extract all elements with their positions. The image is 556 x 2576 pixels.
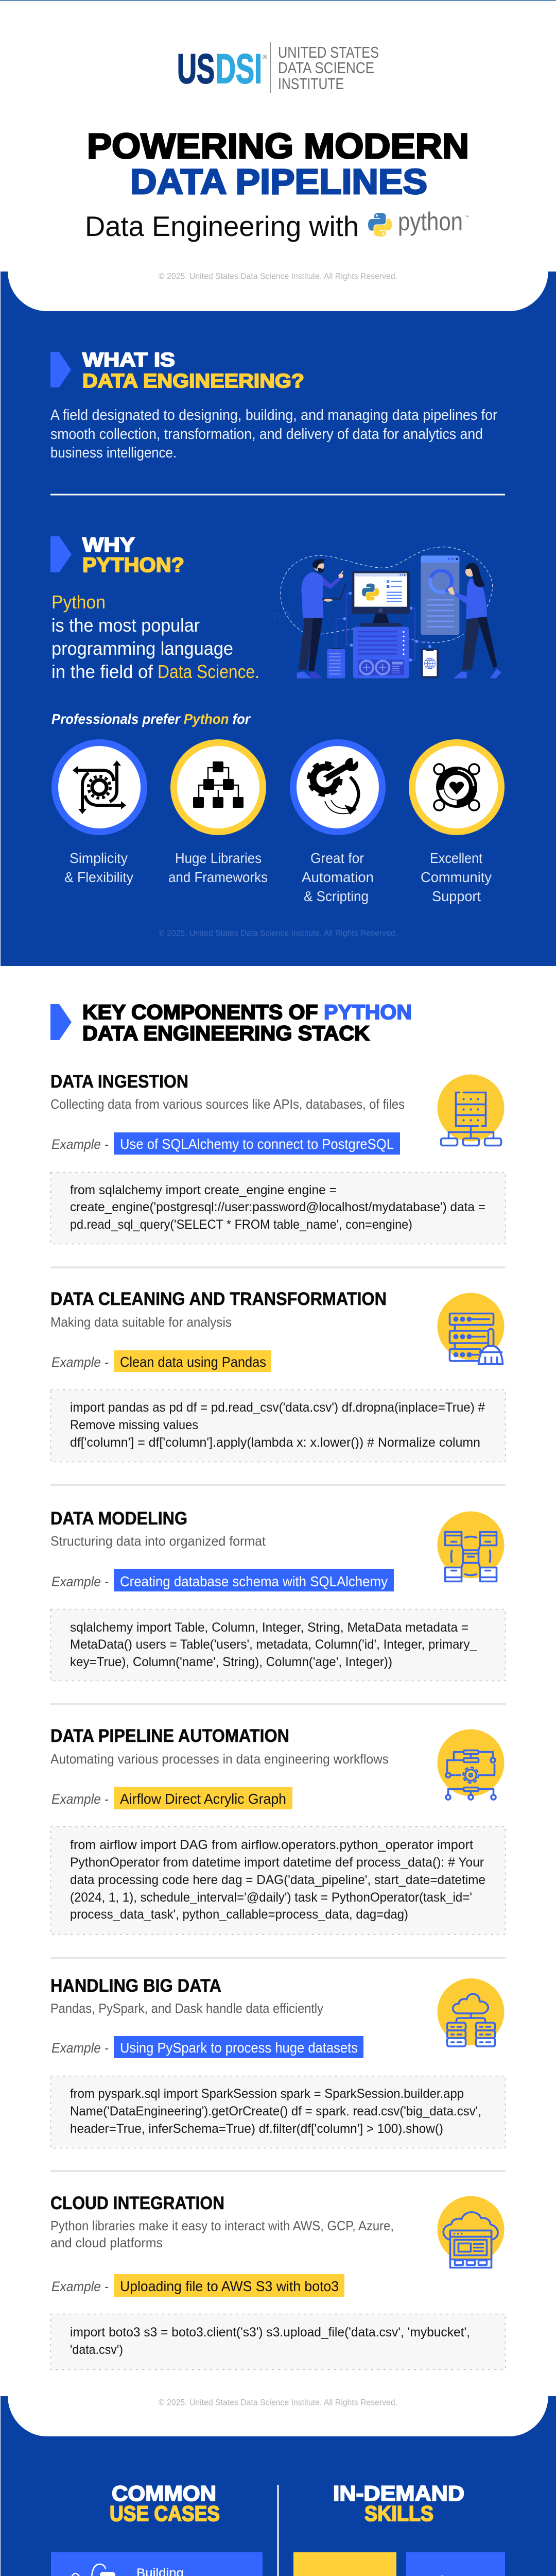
- text: python popularity: is the most popular: [51, 615, 200, 636]
- section: data modeling: sqlalchemy import Table, Column, Integer, String, MetaData metadata =: [70, 1620, 468, 1635]
- section: data cleaning: [50, 1289, 506, 1462]
- copyright: © 2025. United States Data Science Institute. All Rights Reserved.: [159, 2398, 397, 2407]
- section: data ingestion: Use of SQLAlchemy to connect to PostgreSQL: [120, 1136, 394, 1152]
- section: data pipeline automation: Example -: [51, 1791, 109, 1807]
- section: handling big data: HANDLING BIG DATA: [50, 1976, 221, 1996]
- labels: reasons to prefer python: & Flexibility: [64, 869, 133, 885]
- section: handling big data: Name('DataEngineering').getOrCreate() df = spark. read.csv('big_data.csv',: [70, 2104, 481, 2119]
- icon: community support: [409, 739, 505, 835]
- section: data cleaning: Example -: [51, 1354, 109, 1370]
- section: data pipeline automation: DATA PIPELINE AUTOMATION: [50, 1726, 289, 1746]
- icon: simplicity and flexibility: [51, 739, 147, 835]
- heading: why python: WHY: [82, 534, 135, 556]
- title: POWERING MODERN: [87, 126, 469, 166]
- panel: blue lower background: [1, 2396, 556, 2576]
- heading: common use cases: USE CASES: [110, 2501, 220, 2526]
- icon: pipeline automation: [438, 1729, 505, 1800]
- subtitle with python logo: python: [398, 207, 463, 236]
- text: python popularity: in the field of: [51, 661, 153, 682]
- heading: what is data engineering: DATA ENGINEERING?: [82, 370, 304, 392]
- title: DATA PIPELINES: [130, 162, 427, 201]
- subtitle with python logo: Data Engineering with: [85, 210, 359, 242]
- section: data cleaning: df['column'] = df['column'].apply(lambda x: x.lower()) # Normalize column: [70, 1435, 480, 1450]
- section: data modeling: DATA MODELING: [50, 1509, 187, 1529]
- section: data cleaning: Clean data using Pandas: [120, 1354, 266, 1370]
- panel: blue intro background: [1, 271, 556, 966]
- icon: data modeling: [438, 1512, 505, 1582]
- text: data engineering definition: A field designated to designing, building, and managing data pipelines for: [50, 407, 497, 423]
- labels: reasons to prefer python: Huge Libraries: [175, 850, 262, 866]
- section: handling big data: [50, 1976, 506, 2148]
- section: handling big data: header=True, inferSchema=True) df.filter(df['column'] > 100).show(): [70, 2122, 443, 2136]
- section: cloud integration: Example -: [51, 2279, 109, 2294]
- use case: etl/elt pipelines: [51, 2552, 263, 2576]
- heading: key components: [50, 1001, 412, 1045]
- section: data modeling: [50, 1509, 506, 1681]
- section: handling big data: Pandas, PySpark, and Dask handle data efficiently: [50, 2001, 323, 2016]
- labels: reasons to prefer python: Excellent: [430, 850, 482, 866]
- labels: reasons to prefer python: Community: [421, 869, 492, 885]
- logo: USDSI: DSI: [216, 46, 262, 92]
- section: data pipeline automation: [50, 1726, 506, 1934]
- labels: reasons to prefer python: [64, 850, 492, 904]
- section: data pipeline automation: (2024, 1, 1), schedule_interval='@daily') task = PythonOperator(task_id=': [70, 1890, 472, 1905]
- icon: data cleaning: [438, 1293, 505, 1364]
- heading: in-demand skills: IN-DEMAND: [333, 2481, 464, 2505]
- labels: reasons to prefer python: Great for: [310, 850, 364, 866]
- heading: why python: PYTHON?: [82, 554, 184, 577]
- section: data modeling: Creating database schema with SQLAlchemy: [120, 1573, 388, 1589]
- heading: what is data engineering: WHAT IS: [82, 349, 175, 371]
- text: data engineering definition: smooth collection, transformation, and delivery of data for analytics and: [50, 426, 483, 443]
- section: cloud integration: 'data.csv'): [70, 2343, 123, 2357]
- section: data cleaning: Making data suitable for analysis: [50, 1314, 232, 1330]
- logo: USDSI: [177, 42, 379, 93]
- labels: reasons to prefer python: and Frameworks: [168, 869, 268, 885]
- section: data cleaning: import pandas as pd df = pd.read_csv('data.csv') df.dropna(inplace=True) #: [70, 1400, 485, 1415]
- title: [87, 126, 469, 201]
- heading: common use cases: COMMON: [112, 2481, 216, 2505]
- section: data pipeline automation: from airflow import DAG from airflow.operators.python_operator import: [70, 1838, 473, 1852]
- heading: key components: DATA ENGINEERING STACK: [82, 1022, 370, 1045]
- heading: what is data engineering: [50, 349, 304, 392]
- section: data cleaning: Remove missing values: [70, 1418, 198, 1432]
- labels: reasons to prefer python: Support: [432, 888, 481, 904]
- section: handling big data: Example -: [51, 2040, 109, 2056]
- section: cloud integration: [50, 2193, 506, 2370]
- text: data engineering definition: business intelligence.: [50, 445, 177, 461]
- section: cloud integration: Uploading file to AWS S3 with boto3: [120, 2278, 339, 2294]
- section: data ingestion: pd.read_sql_query('SELECT * FROM table_name', con=engine): [70, 1217, 412, 1232]
- copyright: © 2025. United States Data Science Institute. All Rights Reserved.: [159, 928, 397, 938]
- section: data modeling: MetaData() users = Table('users', metadata, Column('id', Integer, primary_: [70, 1637, 477, 1652]
- logo: USDSI: DATA SCIENCE: [278, 59, 374, 77]
- section: data ingestion: Example -: [51, 1137, 109, 1152]
- heading: in-demand skills: SKILLS: [364, 2501, 433, 2526]
- section: data modeling: Structuring data into organized format: [50, 1533, 266, 1549]
- section: data modeling: key=True), Column('name', String), Column('age', Integer)): [70, 1655, 392, 1669]
- text: professionals prefer python: Professionals prefer Python for: [51, 711, 251, 727]
- section: data ingestion: DATA INGESTION: [50, 1072, 188, 1092]
- section: cloud integration: and cloud platforms: [50, 2235, 163, 2250]
- skill: sql and python: [293, 2552, 396, 2576]
- labels: reasons to prefer python: Simplicity: [70, 850, 128, 866]
- text: python popularity: programming language: [51, 638, 233, 659]
- section: data cleaning: DATA CLEANING AND TRANSFORMATION: [50, 1289, 387, 1309]
- section: data ingestion: Collecting data from various sources like APIs, databases, of files: [50, 1096, 405, 1112]
- section: data pipeline automation: PythonOperator from datetime import datetime def process_data(): # Your: [70, 1855, 484, 1870]
- heading: in-demand skills: [333, 2481, 464, 2526]
- logo: USDSI: US: [177, 46, 215, 92]
- text: data engineering definition: [50, 407, 497, 461]
- icon: automation and scripting: [290, 739, 386, 835]
- heading: key components: KEY COMPONENTS OF PYTHON: [82, 1001, 412, 1024]
- heading: why python: [50, 534, 184, 577]
- copyright: © 2025. United States Data Science Institute. All Rights Reserved.: [159, 272, 397, 281]
- heading: common use cases: [110, 2481, 220, 2526]
- text: python popularity: [51, 591, 259, 682]
- subtitle with python logo: ™: [465, 215, 469, 219]
- logo: USDSI: INSTITUTE: [278, 75, 344, 93]
- labels: reasons to prefer python: & Scripting: [304, 888, 369, 904]
- labels: reasons to prefer python: Automation: [302, 869, 374, 885]
- logo: USDSI: ®: [263, 54, 267, 61]
- text: python popularity: Data Science.: [158, 661, 259, 682]
- illustration: two people with monitor and server: [274, 547, 501, 679]
- skill: workflow orchestration: [406, 2552, 505, 2576]
- section: data pipeline automation: process_data_task', python_callable=process_data, dag=dag): [70, 1907, 408, 1922]
- icon: data ingestion: [438, 1075, 505, 1146]
- text: python popularity: Python: [51, 591, 106, 613]
- section: data pipeline automation: Automating various processes in data engineering workflows: [50, 1751, 389, 1767]
- section: handling big data: Using PySpark to process huge datasets: [120, 2040, 358, 2056]
- icon: big data: [438, 1978, 505, 2046]
- subtitle with python logo: [85, 207, 469, 242]
- logo: USDSI: UNITED STATES: [278, 43, 379, 61]
- icon: huge libraries: [170, 739, 266, 835]
- section: data pipeline automation: data processing code here dag = DAG('data_pipeline', start_date=datetime: [70, 1873, 485, 1887]
- section: data ingestion: from sqlalchemy import create_engine engine =: [70, 1183, 337, 1197]
- section: data ingestion: [50, 1072, 506, 1244]
- section: data modeling: Example -: [51, 1574, 109, 1589]
- section: handling big data: from pyspark.sql import SparkSession spark = SparkSession.builder.app: [70, 2087, 464, 2101]
- icon: cloud integration: [438, 2196, 505, 2268]
- section: cloud integration: CLOUD INTEGRATION: [50, 2193, 224, 2213]
- section: data ingestion: create_engine('postgresql://user:password@localhost/mydatabase') data =: [70, 1200, 485, 1214]
- section: data pipeline automation: Airflow Direct Acrylic Graph: [120, 1791, 286, 1807]
- section: cloud integration: import boto3 s3 = boto3.client('s3') s3.upload_file('data.csv', 'mybucket',: [70, 2325, 470, 2340]
- section: cloud integration: Python libraries make it easy to interact with AWS, GCP, Azure,: [50, 2218, 394, 2233]
